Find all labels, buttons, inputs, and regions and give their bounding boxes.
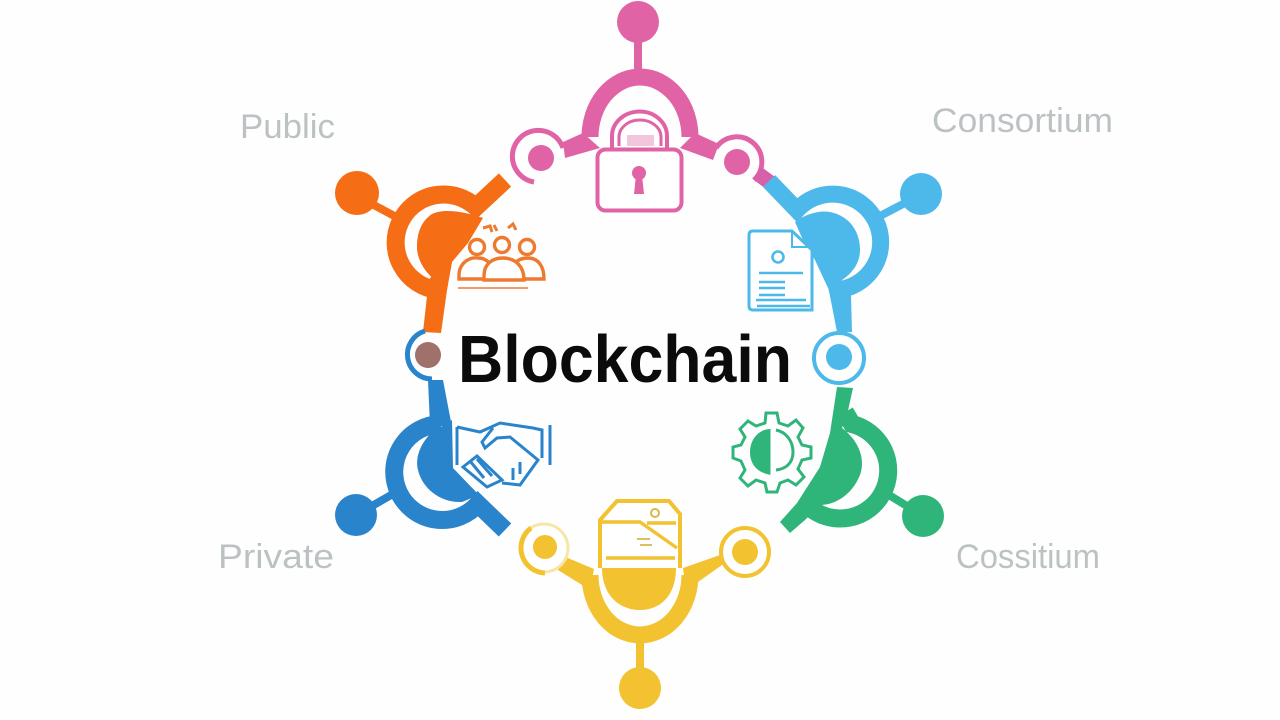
label: Cossitium: Cossitium xyxy=(956,538,1100,576)
segment: sky blue document xyxy=(749,173,942,383)
label: Public: Public xyxy=(240,108,335,146)
icon: handshake xyxy=(457,423,550,487)
title: Blockchain: Blockchain xyxy=(458,322,792,397)
segment: blue handshake xyxy=(335,380,550,536)
label: Consortium: Consortium xyxy=(932,102,1113,140)
node: right yellow ring xyxy=(721,528,769,576)
segment: green gear xyxy=(733,387,944,537)
label: Private: Private xyxy=(218,538,334,576)
icon: card device xyxy=(600,501,680,610)
node: sky blue ring xyxy=(814,333,864,383)
icon: padlock xyxy=(598,112,682,210)
node: left yellow ring xyxy=(520,524,568,573)
segment: orange people xyxy=(335,171,544,333)
node: left ring xyxy=(407,331,441,379)
segment: pink lock xyxy=(512,1,762,210)
icon: document xyxy=(749,231,812,310)
icon: gear xyxy=(733,413,811,492)
icon: group of people xyxy=(458,224,544,288)
segment: yellow device xyxy=(520,501,769,709)
